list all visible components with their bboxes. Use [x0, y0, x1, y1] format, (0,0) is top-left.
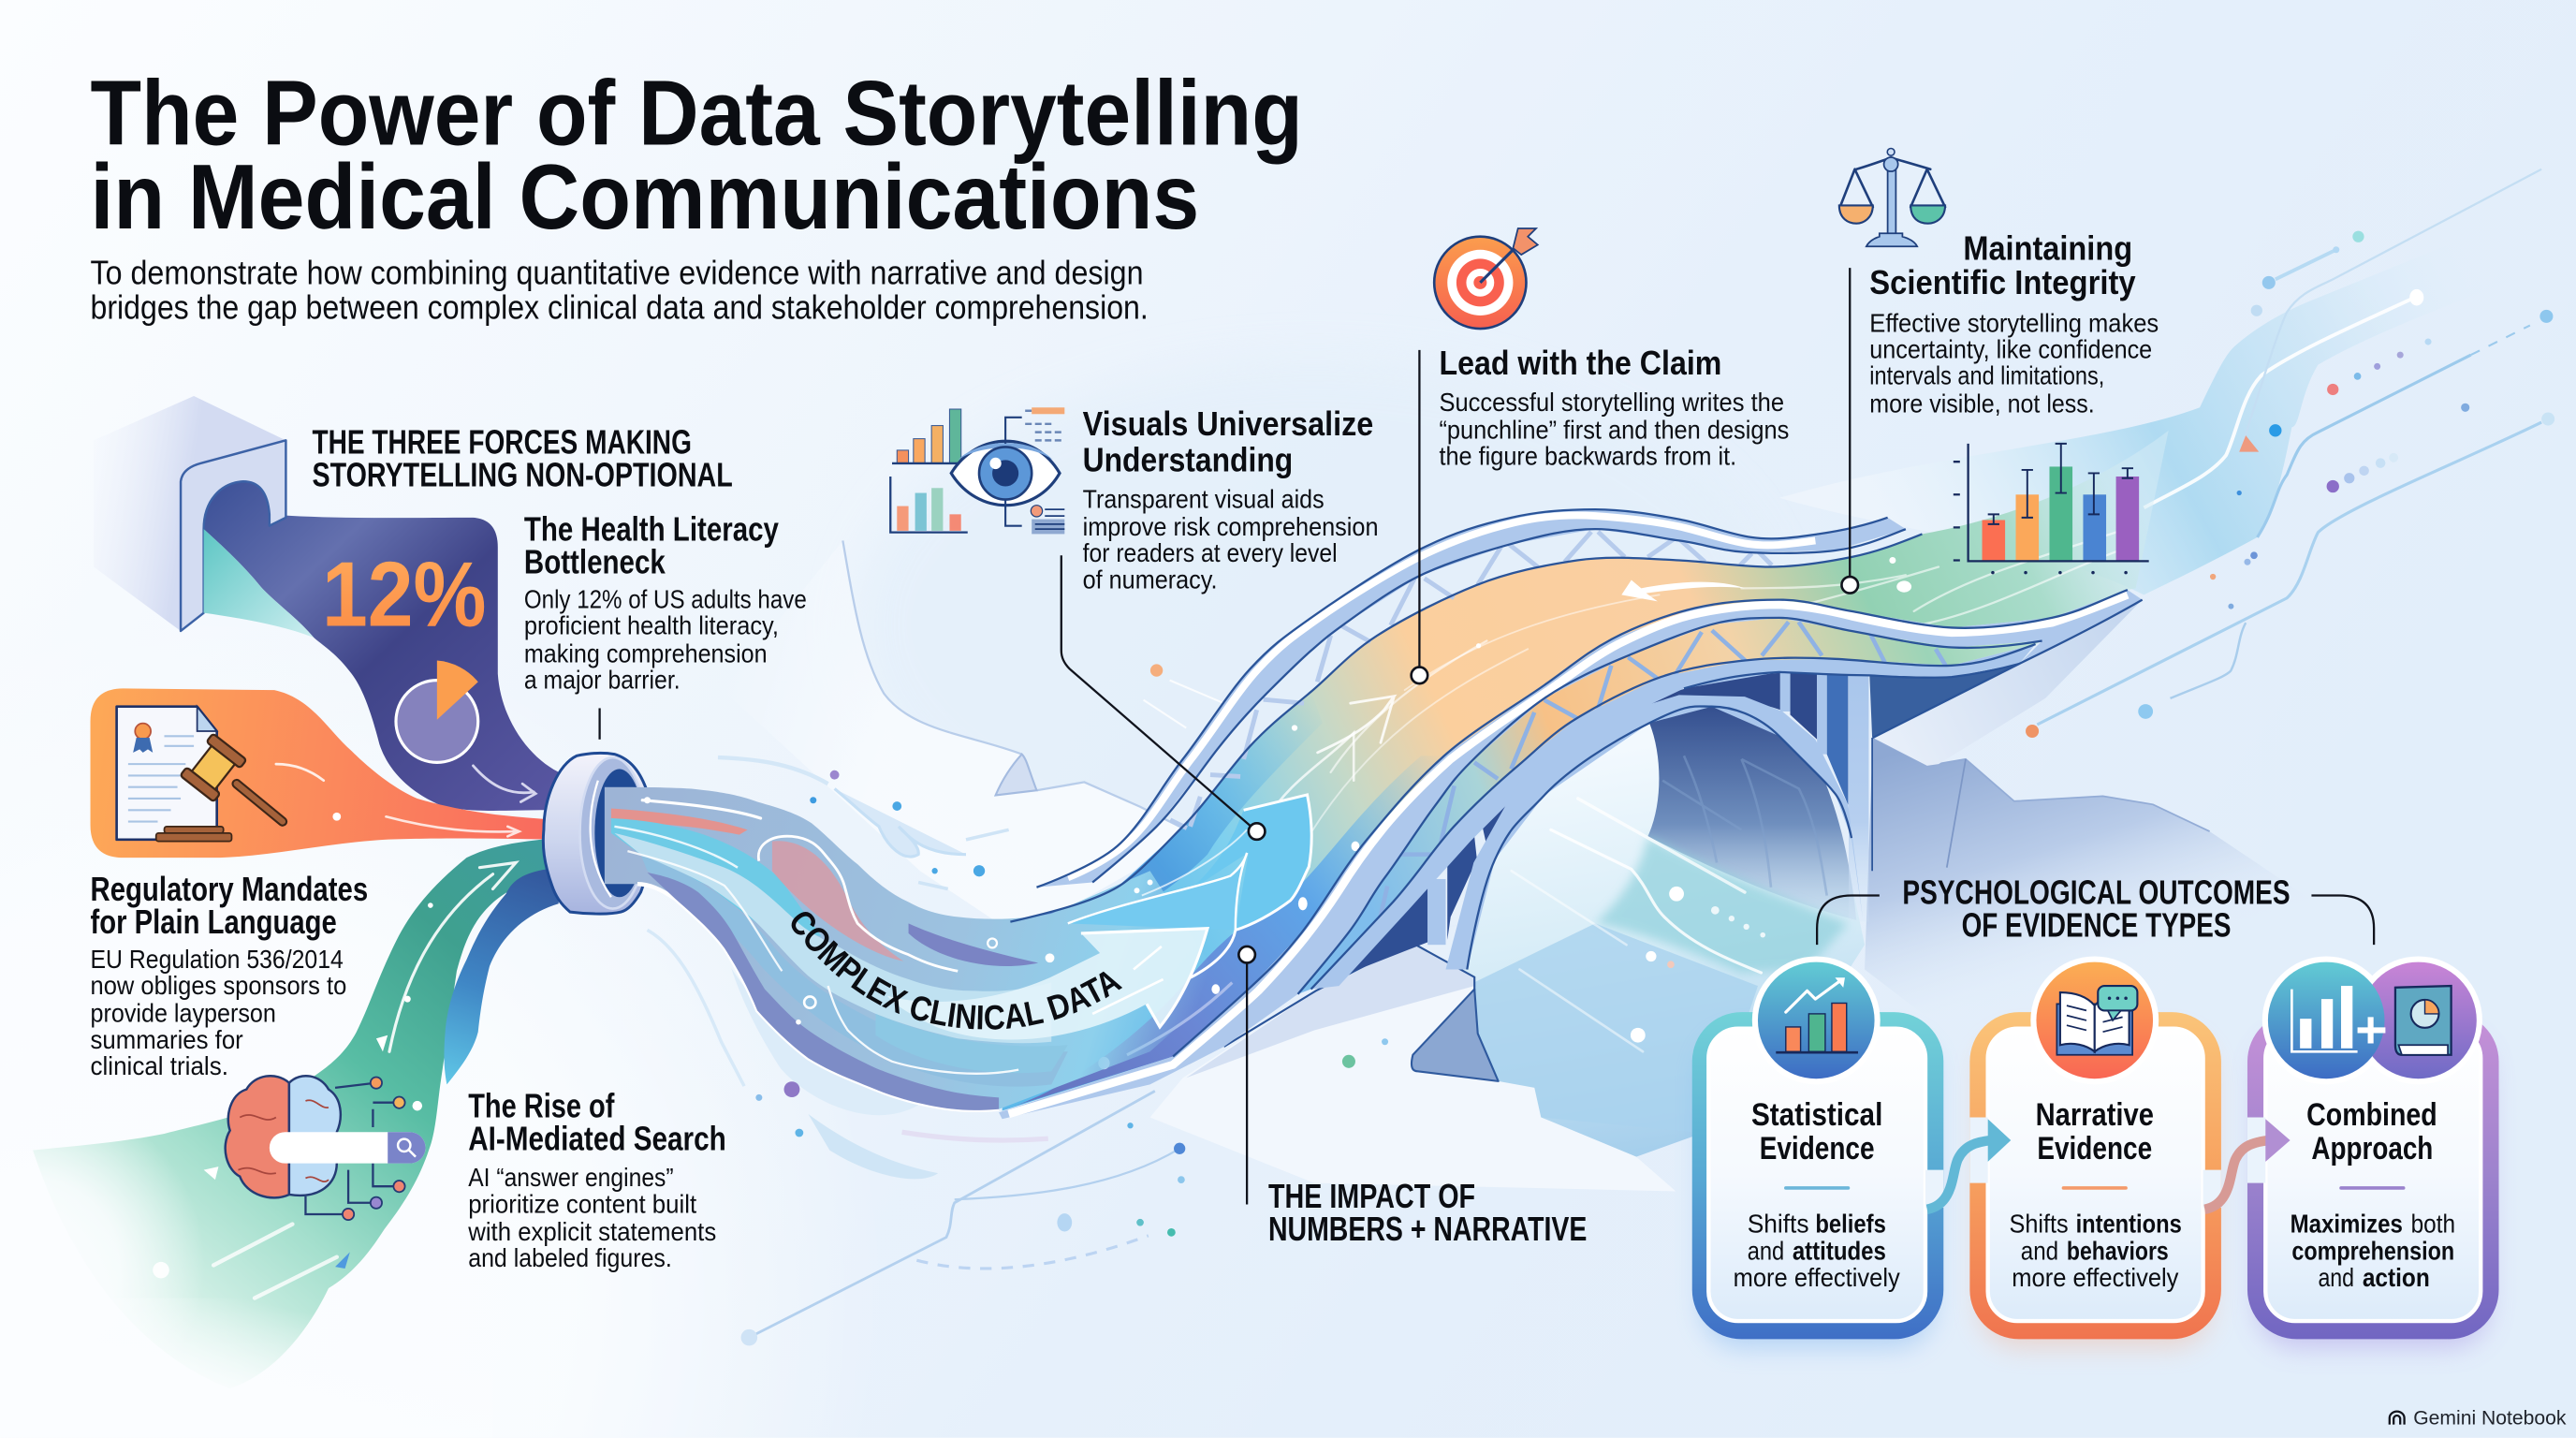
bridge deck: [999, 431, 2169, 1110]
flow: AI search green ribbon: [0, 838, 559, 1438]
panel: statistical evidence: beliefs: [1815, 1209, 1886, 1238]
panel: narrative evidence: intentions: [2076, 1209, 2182, 1238]
label on stream: complex clinical data: COMPLEX CLINICAL DATA: [792, 912, 1122, 1030]
icon: balance scales: [1839, 148, 1945, 246]
text: visuals universalize understanding: Understanding: [1083, 441, 1293, 479]
text: health literacy bottleneck: The Health Literacy: [524, 509, 779, 548]
panel: statistical evidence: attitudes: [1793, 1236, 1886, 1265]
text: health literacy bottleneck: Only 12% of US adults have: [524, 584, 807, 613]
panel: combined approach: comprehension: [2291, 1236, 2454, 1265]
icon: pie chart: [396, 661, 478, 762]
pipe ring connector: [543, 753, 651, 914]
icon: target with arrow: [1434, 228, 1538, 329]
text: health literacy bottleneck: Bottleneck: [524, 543, 666, 581]
text: AI-mediated search: AI-Mediated Search: [468, 1120, 726, 1158]
panel: narrative evidence: more effectively: [2012, 1263, 2179, 1292]
dark panels: [1347, 600, 2143, 974]
deck lower rail: [999, 590, 2143, 1119]
panel: narrative evidence: Shifts: [2009, 1209, 2069, 1238]
watermark: Gemini Notebook: Gemini Notebook: [2413, 1408, 2567, 1430]
rail 2: [1311, 644, 2036, 990]
title: [91, 61, 1303, 248]
lower cliff near bridge: [1150, 942, 1676, 1191]
panel: narrative evidence: [1969, 956, 2221, 1347]
callout lines: [600, 268, 1858, 1204]
heading: psychological outcomes: OF EVIDENCE TYPES: [1962, 905, 2231, 944]
panel: statistical evidence: Shifts: [1748, 1209, 1809, 1238]
subtitle: To demonstrate how combining quantitative evidence with narrative and design: [91, 254, 1144, 292]
heading: impact of numbers + narrative: THE IMPACT OF: [1268, 1177, 1475, 1215]
panel: combined approach: action: [2363, 1263, 2430, 1292]
deck under-truss fill: [1298, 618, 2042, 994]
text: regulatory mandates: [91, 870, 368, 1080]
panel: combined approach: [2247, 956, 2499, 1347]
icon: stats circle: [1752, 956, 1881, 1084]
panel: combined approach: and: [2318, 1263, 2354, 1292]
deck top line: [1010, 534, 1922, 922]
text: regulatory mandates: clinical trials.: [91, 1051, 228, 1080]
panel: combined approach: Approach: [2311, 1131, 2433, 1167]
lower arch structure: [1311, 600, 2143, 990]
text: maintaining scientific integrity: [1869, 228, 2159, 418]
panel: statistical evidence: [1692, 956, 1943, 1347]
text: visuals universalize understanding: improve risk comprehension: [1083, 512, 1379, 541]
left cliff: [723, 540, 1183, 936]
title: in Medical Communications: [91, 145, 1199, 248]
text: maintaining scientific integrity: intervals and limitations,: [1869, 361, 2104, 390]
subtitle: [91, 254, 1149, 326]
text: maintaining scientific integrity: Effective storytelling makes: [1869, 309, 2159, 338]
text: lead with the claim: “punchline” first and then designs: [1439, 416, 1789, 445]
bridge deck details: [1265, 526, 2136, 855]
text: AI-mediated search: AI “answer engines”: [468, 1163, 674, 1192]
text: lead with the claim: [1439, 344, 1789, 471]
panel: narrative evidence: and: [2021, 1236, 2058, 1265]
text: visuals universalize understanding: Visuals Universalize: [1083, 404, 1373, 443]
panel: statistical evidence: Evidence: [1760, 1131, 1875, 1167]
bar chart with error bars: [1954, 444, 2149, 574]
right background ribbons and dots: [1779, 169, 2554, 738]
lower truss: [1377, 622, 1946, 930]
panel: combined approach: Combined: [2306, 1097, 2437, 1133]
right cliff: [1865, 738, 2465, 1051]
text: AI-mediated search: prioritize content built: [468, 1189, 697, 1218]
text: regulatory mandates: now obliges sponsors to: [91, 971, 346, 1000]
text: maintaining scientific integrity: uncertainty, like confidence: [1869, 335, 2152, 364]
text: lead with the claim: Lead with the Claim: [1439, 344, 1721, 382]
flow arrow: [473, 766, 535, 801]
upper rail: [1010, 509, 1922, 922]
upper truss: [1170, 532, 1772, 829]
text: regulatory mandates: summaries for: [91, 1025, 243, 1054]
heading: three forces: THE THREE FORCES MAKING: [312, 422, 692, 461]
icon: chart plus book: [2262, 956, 2482, 1084]
tunnel box: [94, 396, 314, 638]
text: maintaining scientific integrity: Scientific Integrity: [1869, 263, 2136, 301]
flow: health literacy dark ribbon: [94, 396, 567, 822]
text: regulatory mandates: for Plain Language: [91, 902, 337, 941]
sky under arch: [1456, 705, 1865, 1157]
text: AI-mediated search: and labeled figures.: [468, 1243, 672, 1272]
text: maintaining scientific integrity: more visible, not less.: [1869, 389, 2095, 418]
title: The Power of Data Storytelling: [91, 61, 1303, 164]
arrow: narrative to combined: [2204, 1119, 2291, 1210]
icon: brain with search bar and circuits: [226, 1076, 426, 1220]
flow: regulatory orange ribbon: [91, 688, 559, 858]
text: regulatory mandates: provide layperson: [91, 999, 276, 1028]
text: health literacy bottleneck: making comprehension: [524, 638, 768, 668]
stream arrow head: [887, 929, 1208, 1040]
heading: psychological outcomes: [1817, 873, 2374, 945]
text: regulatory mandates: Regulatory Mandates: [91, 870, 368, 908]
heading: three forces: [312, 422, 733, 494]
panel: statistical evidence: Statistical: [1751, 1097, 1882, 1133]
main data stream: [605, 786, 1313, 1112]
sky light streaks: [1512, 799, 1765, 1051]
bottom wisps and lines: [648, 664, 1388, 1345]
text: lead with the claim: the figure backwards from it.: [1439, 442, 1736, 471]
heading: impact of numbers + narrative: NUMBERS + NARRATIVE: [1268, 1210, 1587, 1248]
bridge truss and rails: [999, 509, 2143, 1119]
heading: psychological outcomes: PSYCHOLOGICAL OUTCOMES: [1902, 873, 2291, 911]
heading: impact of numbers + narrative: [1268, 1177, 1587, 1248]
icon: open book with speech bubble: [2030, 956, 2159, 1084]
subtitle: bridges the gap between complex clinical data and stakeholder comprehension.: [91, 287, 1149, 326]
panel: statistical evidence: more effectively: [1734, 1263, 1900, 1292]
text: AI-mediated search: [467, 1086, 726, 1272]
panel: combined approach: both: [2411, 1209, 2455, 1238]
text: maintaining scientific integrity: Maintaining: [1963, 228, 2132, 267]
text: health literacy bottleneck: proficient health literacy,: [524, 610, 779, 639]
text: regulatory mandates: EU Regulation 536/2014: [91, 945, 344, 974]
heading: three forces: STORYTELLING NON-OPTIONAL: [312, 456, 733, 494]
panel: narrative evidence: Evidence: [2037, 1131, 2152, 1167]
text: visuals universalize understanding: [1083, 404, 1379, 594]
big stat 12%: 12%: [322, 543, 487, 646]
icon: eye with charts: [890, 407, 1064, 534]
panel: narrative evidence: Narrative: [2036, 1097, 2154, 1133]
text: visuals universalize understanding: Transparent visual aids: [1083, 484, 1325, 513]
panel: narrative evidence: behaviors: [2067, 1236, 2169, 1265]
panel: combined approach: Maximizes: [2291, 1209, 2403, 1238]
text: health literacy bottleneck: a major barrier.: [524, 665, 681, 694]
text: health literacy bottleneck: [524, 509, 807, 694]
icon: document and gavel: [117, 707, 283, 842]
arrow: statistical to narrative: [1927, 1119, 2011, 1210]
text: AI-mediated search: The Rise of: [468, 1086, 615, 1124]
text: visuals universalize understanding: of numeracy.: [1083, 565, 1218, 594]
panel: statistical evidence: and: [1748, 1236, 1784, 1265]
text: lead with the claim: Successful storytelling writes the: [1439, 388, 1784, 417]
text: AI-mediated search: with explicit statements: [467, 1217, 716, 1246]
arch band: [1445, 695, 1863, 970]
pier columns: [1427, 672, 1868, 945]
big blue leaf arrow: [1068, 795, 1311, 977]
text: visuals universalize understanding: for readers at every level: [1083, 538, 1338, 567]
